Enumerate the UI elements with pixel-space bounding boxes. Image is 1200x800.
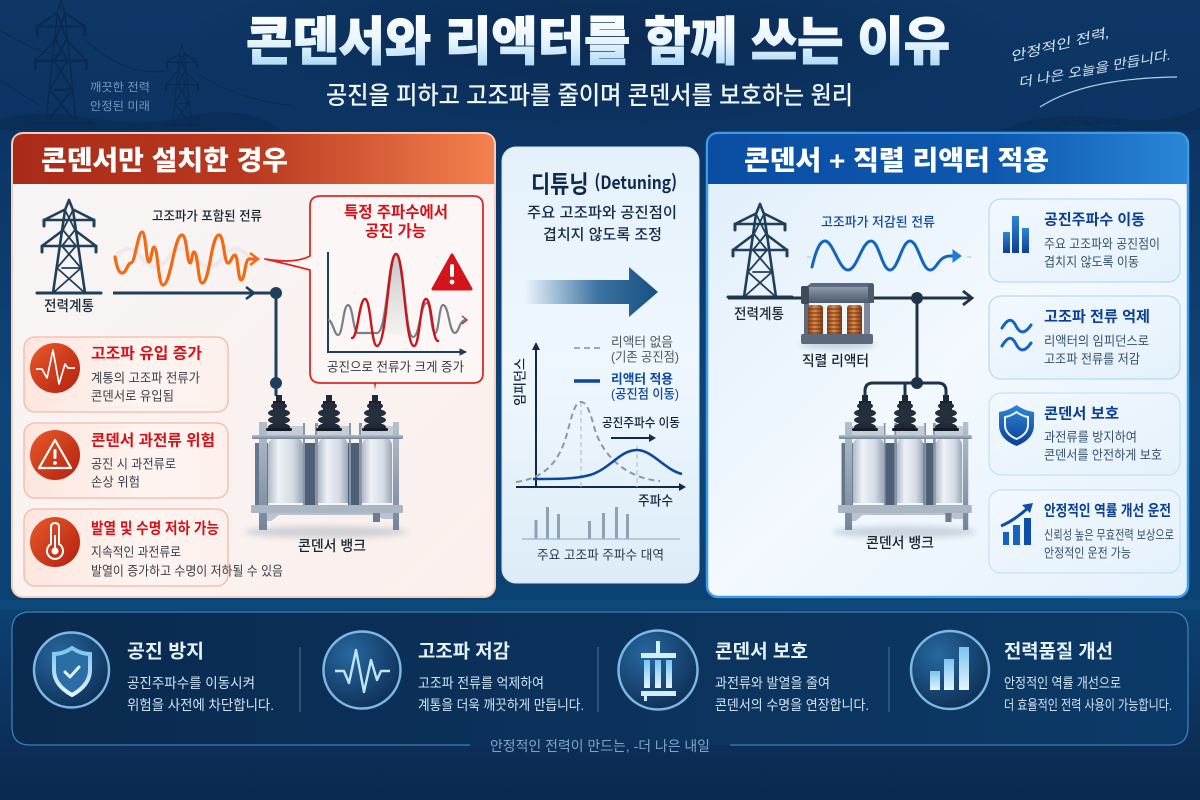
callout: resonance — [265, 196, 483, 390]
icon: thermometer — [30, 517, 80, 567]
benefit: resonance prevention: 공진주파수를 이동시켜 — [127, 675, 255, 691]
left slogan: 안정된 미래 — [90, 100, 150, 113]
label: current with harmonics: 고조파가 포함된 전류 — [152, 208, 262, 224]
chart: harmonic bands — [522, 507, 680, 562]
card: stable power factor: 안정적인 운전 가능 — [1044, 546, 1131, 560]
benefit: capacitor protection — [618, 630, 869, 713]
label: power grid: 전력계통 — [734, 306, 784, 323]
card: heat and lifetime: 발열이 증가하고 수명이 저하될 수 있음 — [91, 564, 283, 578]
label: capacitor bank: 콘덴서 뱅크 — [866, 535, 934, 552]
handwritten slogan — [1008, 25, 1177, 107]
card: stable power factor: 안정적인 역률 개선 운전 — [1044, 502, 1171, 520]
legend: 리액터 적용 — [611, 372, 673, 386]
background towers left — [0, 0, 290, 125]
subtitle: 공진을 피하고 고조파를 줄이며 콘덴서를 보호하는 원리 — [326, 82, 853, 110]
label: power grid: 전력계통 — [44, 298, 94, 315]
background towers right — [1063, 62, 1117, 127]
benefit: power quality: 전력품질 개선 — [1004, 640, 1113, 662]
panel header: capacitor only: 콘덴서만 설치한 경우 — [41, 146, 288, 176]
panel header: capacitor plus reactor — [708, 134, 1187, 184]
icon: bars — [911, 631, 989, 709]
panel: benefits footer — [12, 612, 1188, 745]
icon: warning triangle — [433, 255, 471, 289]
legend: (공진점 이동) — [611, 386, 679, 402]
detuning description: 겹치지 않도록 조정 — [543, 226, 662, 244]
card: resonance shift — [989, 199, 1180, 282]
detuning description — [527, 204, 677, 244]
capacitor bank — [832, 395, 976, 538]
tagline: 안정적인 전력이 만드는, -더 나은 내일 — [490, 738, 710, 754]
card: heat and lifetime — [24, 509, 283, 586]
feed line — [113, 287, 280, 396]
arrow: detuning direction — [525, 267, 658, 317]
annotation: resonance shift: 공진주파수 이동 — [602, 416, 680, 430]
icon: waves — [1002, 320, 1031, 350]
icon: pulse — [30, 343, 80, 393]
card: overcurrent risk — [24, 423, 228, 498]
detuning description: 주요 고조파와 공진점이 — [527, 204, 677, 222]
benefit: capacitor protection: 콘덴서 보호 — [715, 640, 808, 662]
annotation: resonance shift — [602, 416, 680, 442]
icon: capacitor symbol — [618, 630, 698, 710]
card: harmonic inflow: 고조파 유입 증가 — [91, 344, 202, 362]
icon: shield — [999, 405, 1034, 446]
icon: series reactor — [800, 283, 876, 349]
card: harmonic inflow: 계통의 고조파 전류가 — [91, 370, 200, 386]
panel: detuning — [502, 147, 699, 583]
legend: 리액터 없음 — [611, 334, 673, 350]
detuning heading: 디튜닝 (Detuning) — [531, 164, 677, 200]
benefit: resonance prevention: 공진 방지 — [127, 640, 204, 662]
panel header: capacitor only — [13, 134, 494, 184]
panel header: capacitor plus reactor: 콘덴서 + 직렬 리액터 적용 — [744, 146, 1049, 176]
icon: growth chart — [1001, 503, 1033, 545]
feed line — [728, 291, 972, 397]
chart: smooth waveform — [807, 241, 971, 270]
label: capacitor bank: 콘덴서 뱅크 — [298, 538, 366, 555]
chart: impedance vs frequency: 임피던스 — [512, 358, 528, 406]
icon: warning — [30, 430, 80, 480]
benefit: resonance prevention: 위험을 사전에 차단합니다. — [127, 697, 274, 713]
left slogan — [90, 81, 150, 113]
callout: resonance: 특정 주파수에서 — [344, 204, 448, 222]
handwritten slogan: 더 나은 오늘을 만듭니다. — [1017, 47, 1172, 90]
card: resonance shift: 겹치지 않도록 이동 — [1044, 254, 1139, 270]
card: harmonic suppression: 리액터의 임피던스로 — [1044, 334, 1149, 348]
handwritten slogan: 안정적인 전력, — [1008, 25, 1111, 64]
benefit: resonance prevention — [34, 632, 274, 713]
card: resonance shift: 공진주파수 이동 — [1044, 212, 1145, 228]
chart: harmonic waveform — [115, 232, 258, 285]
card: harmonic inflow — [24, 337, 228, 412]
benefit: power quality — [911, 631, 1172, 713]
benefit: harmonic reduction — [324, 632, 584, 713]
card: stable power factor — [989, 490, 1180, 573]
card: resonance shift: 주요 고조파와 공진점이 — [1044, 236, 1160, 252]
label: reduced harmonics current: 고조파가 저감된 전류 — [821, 214, 935, 230]
panel: capacitor only — [12, 133, 495, 597]
card: capacitor protection: 콘덴서를 안전하게 보호 — [1044, 448, 1162, 462]
chart: resonance curves — [328, 252, 467, 355]
card: heat and lifetime: 발열 및 수명 저하 가능 — [91, 520, 219, 538]
benefit: capacitor protection: 콘덴서의 수명을 연장합니다. — [715, 697, 869, 713]
icon: bars — [1003, 216, 1029, 253]
card: overcurrent risk: 공진 시 과전류로 — [91, 456, 176, 472]
label: series reactor: 직렬 리액터 — [802, 353, 869, 370]
chart: impedance vs frequency — [512, 334, 686, 508]
callout: resonance: 공진으로 전류가 크게 증가 — [327, 360, 464, 374]
card: overcurrent risk: 콘덴서 과전류 위험 — [91, 432, 215, 450]
benefit: harmonic reduction: 고조파 저감 — [418, 640, 510, 662]
icon: transmission tower — [37, 200, 101, 293]
card: overcurrent risk: 손상 위험 — [91, 474, 140, 490]
legend: (기존 공진점) — [611, 350, 679, 364]
icon: pulse — [324, 632, 400, 708]
card: harmonic inflow: 콘덴서로 유입됨 — [91, 388, 174, 404]
card: capacitor protection — [989, 393, 1180, 475]
card: harmonic suppression: 고조파 전류를 저감 — [1044, 352, 1140, 366]
benefit: power quality: 안정적인 역률 개선으로 — [1004, 675, 1121, 691]
card: capacitor protection: 과전류를 방지하여 — [1044, 430, 1137, 444]
card: heat and lifetime: 지속적인 과전류로 — [91, 544, 181, 560]
chart: harmonic bands: 주요 고조파 주파수 대역 — [537, 548, 664, 562]
capacitor bank — [244, 395, 408, 538]
card: capacitor protection: 콘덴서 보호 — [1044, 406, 1119, 422]
legend — [574, 334, 679, 402]
icon: shield check — [34, 632, 109, 708]
callout: resonance: 공진 가능 — [365, 222, 426, 240]
panel: capacitor plus series reactor — [707, 133, 1188, 597]
icon: transmission tower — [728, 204, 792, 297]
left slogan: 깨끗한 전력 — [90, 81, 150, 94]
benefit: capacitor protection: 과전류와 발열을 줄여 — [715, 675, 830, 691]
benefit: harmonic reduction: 계통을 더욱 깨끗하게 만듭니다. — [418, 697, 584, 713]
benefit: harmonic reduction: 고조파 전류를 억제하여 — [418, 675, 544, 691]
card: harmonic suppression — [989, 296, 1180, 379]
chart: impedance vs frequency: 주파수 — [638, 494, 673, 508]
title: 콘덴서와 리액터를 함께 쓰는 이유 — [246, 14, 950, 72]
card: harmonic suppression: 고조파 전류 억제 — [1044, 308, 1150, 326]
